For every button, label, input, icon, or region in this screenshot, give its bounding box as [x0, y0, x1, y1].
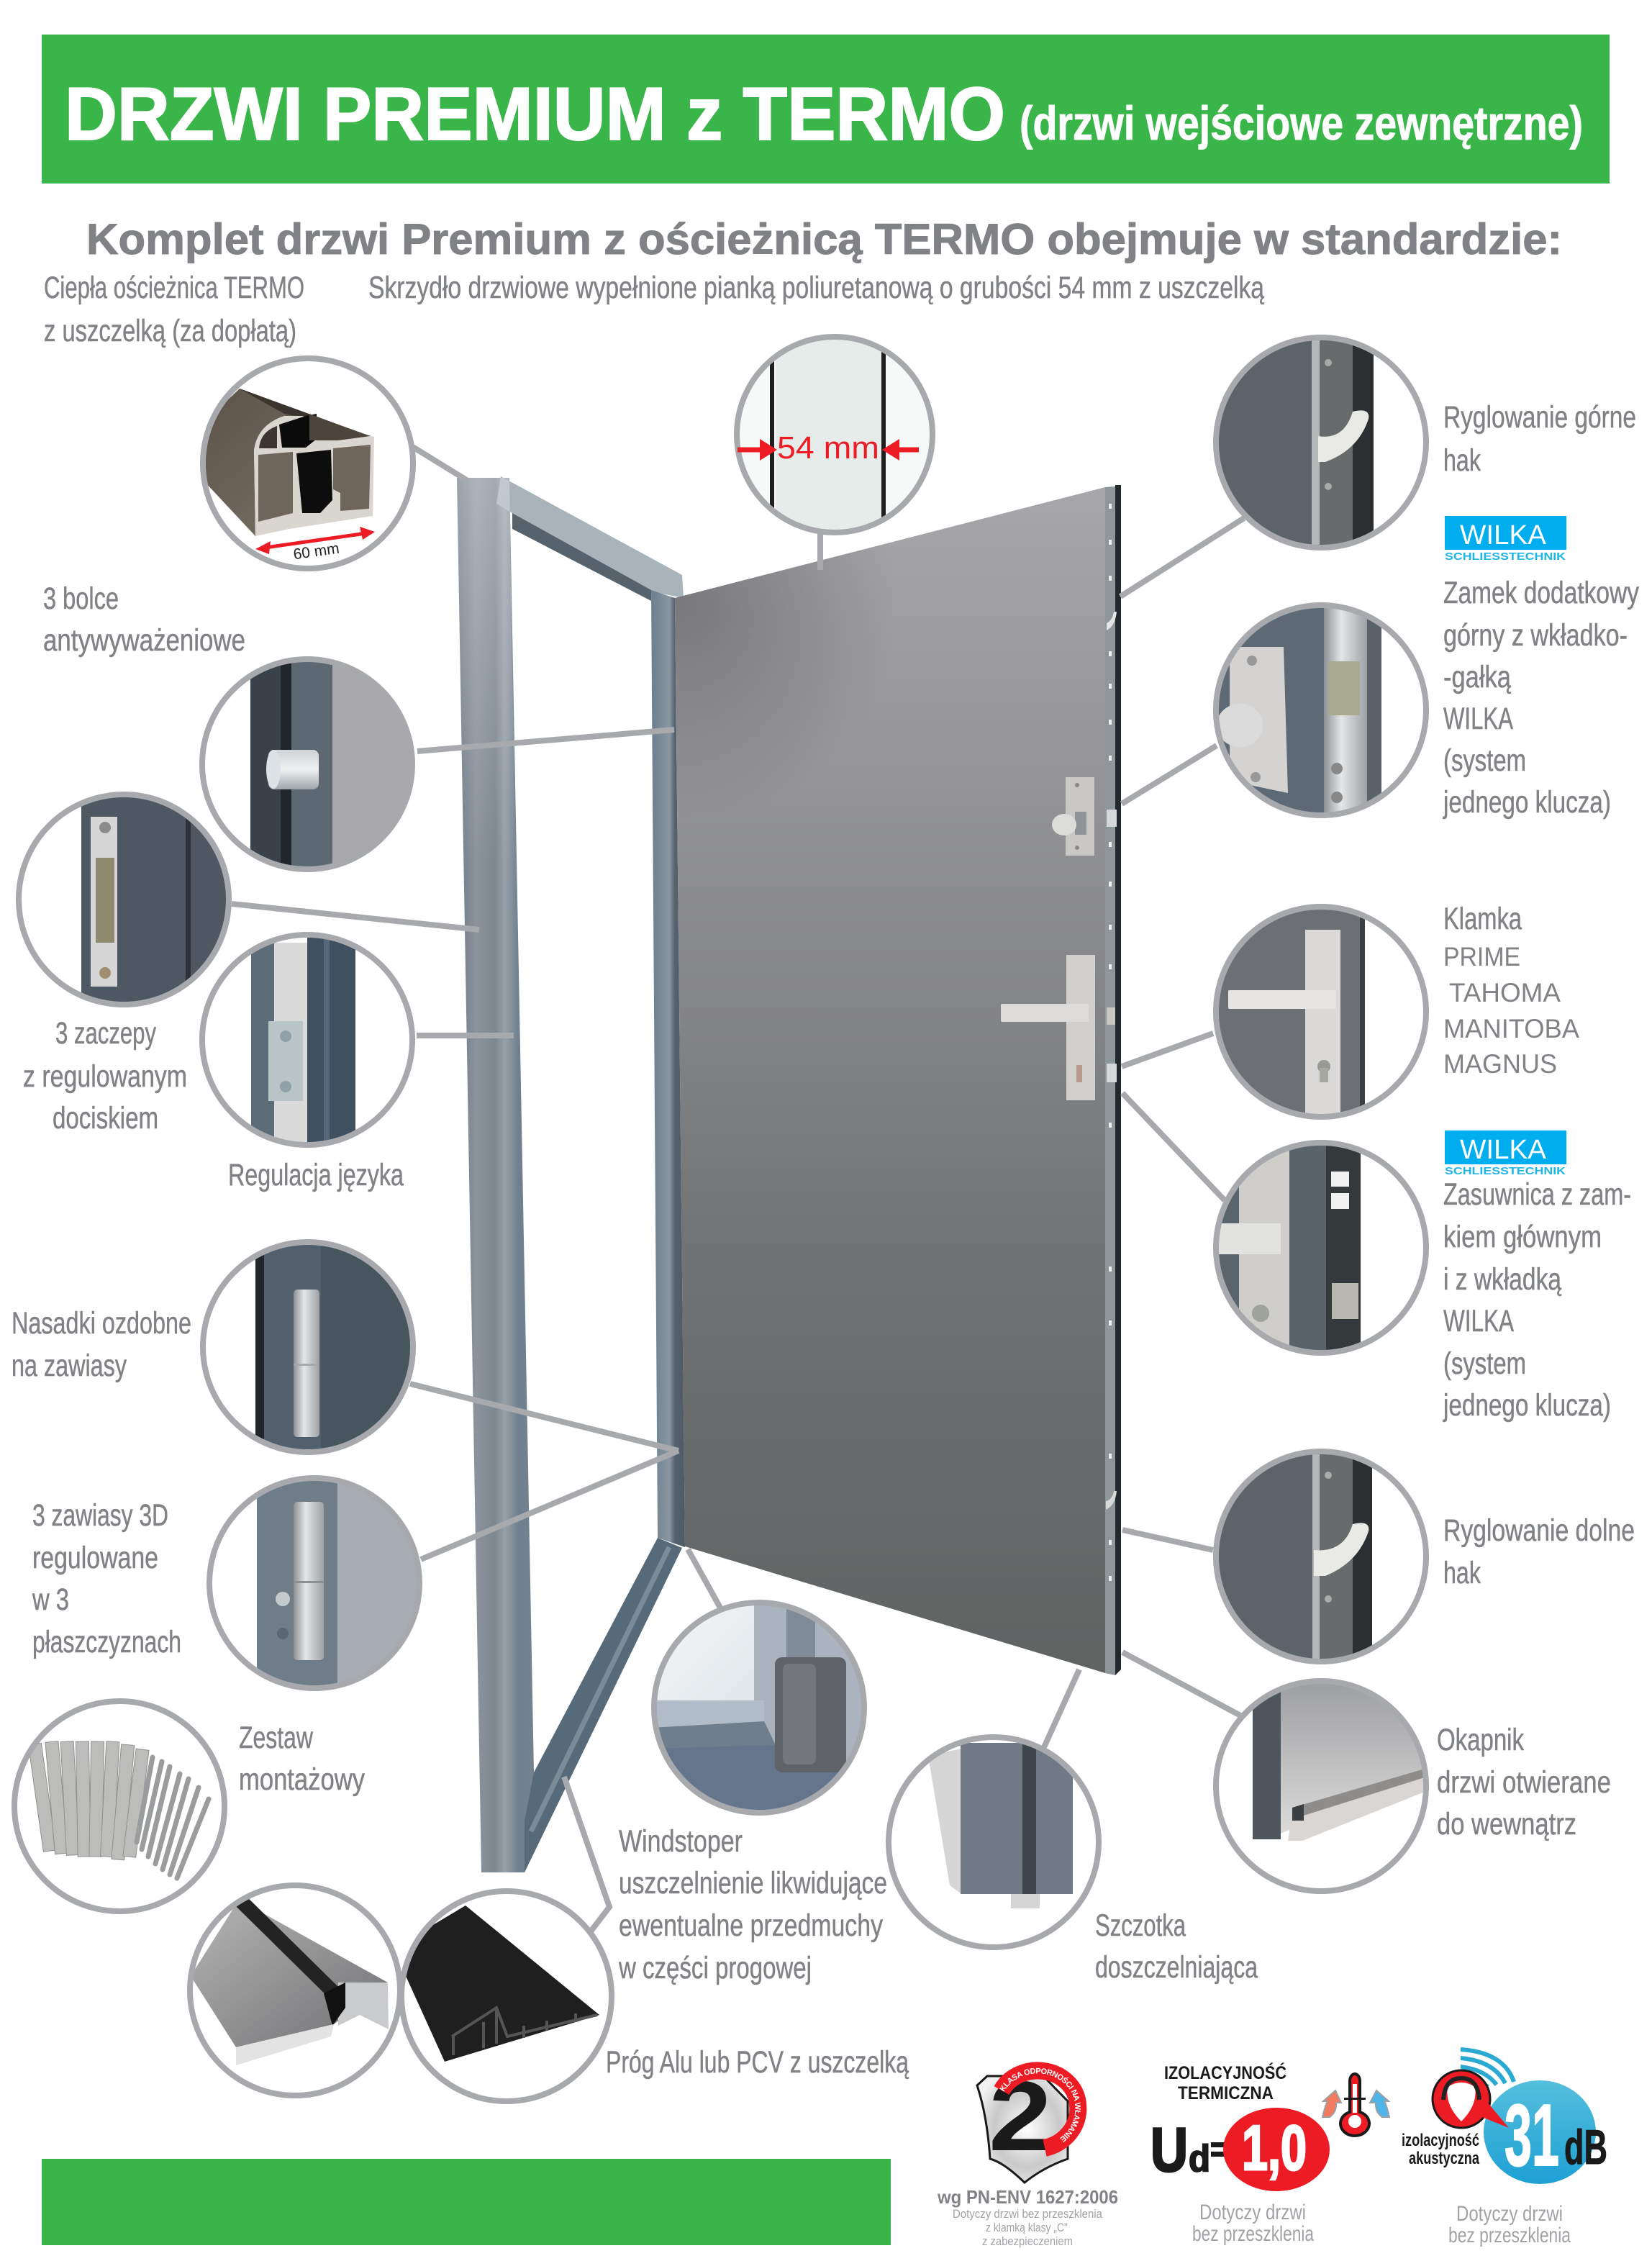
detail: hinge cap [200, 1239, 416, 1455]
label: strike plates: 3 zaczepy [55, 1016, 156, 1051]
detail: PVC threshold [399, 1888, 614, 2104]
label: strike plates: dociskiem [53, 1101, 158, 1136]
label: strike plates: z regulowanym [23, 1059, 187, 1094]
bottom green bar [42, 2159, 891, 2245]
label: hinge caps [12, 1306, 191, 1383]
leader: top hook [1120, 518, 1244, 597]
label: hinge caps: na zawiasy [12, 1349, 127, 1383]
frame top highlight [457, 478, 515, 864]
bottom diagonal of frame [525, 1538, 682, 1872]
leader: tongue adjustment [417, 1033, 514, 1038]
detail: 54 mm door section [734, 334, 935, 535]
leader: handle [1122, 1033, 1213, 1066]
caption: frame [44, 271, 304, 348]
leader: brush seal [1044, 1669, 1079, 1747]
red ring [1002, 2070, 1078, 2148]
leader: main lock [1122, 1093, 1225, 1200]
label: acoustic note: bez przeszklenia [1448, 2224, 1571, 2247]
Ud symbol: U [1150, 2116, 1188, 2185]
label: main lock: i z wkładką [1443, 1262, 1561, 1297]
label: anti-burglary bolts: 3 bolce [43, 581, 119, 616]
label: bottom hook [1443, 1513, 1635, 1590]
acoustic caption: akustyczna [1409, 2149, 1479, 2168]
acoustic caption: izolacyjność [1402, 2131, 1479, 2150]
detail: top hook [1213, 335, 1429, 550]
label: norm: z zabezpieczeniem [982, 2234, 1073, 2248]
leader: bottom hook [1122, 1530, 1213, 1550]
detail: tongue adjustment [199, 932, 415, 1148]
detail: bottom hook [1213, 1449, 1429, 1664]
label: tongue adjustment: Regulacja języka [228, 1158, 404, 1192]
detail: mounting kit [12, 1698, 228, 1914]
label: mounting kit: montażowy [239, 1762, 365, 1797]
label: handle models: PRIME [1443, 942, 1520, 971]
label: handle models: MAGNUS [1443, 1049, 1557, 1079]
thermal heading: IZOLACYJNOŚĆ [1164, 2062, 1286, 2083]
label: windstopper: ewentualne przedmuchy [619, 1908, 883, 1943]
numeral 2: 2 [989, 2061, 1052, 2172]
icon: warm arrow [1322, 2090, 1341, 2117]
60 mm dimension [255, 527, 375, 563]
caption: frame: Ciepła ościeżnica TERMO [44, 271, 304, 305]
thermal heading: TERMICZNA [1178, 2083, 1274, 2103]
value 31: 31 [1504, 2086, 1559, 2184]
label: norm: Dotyczy drzwi bez przeszklenia [953, 2207, 1102, 2221]
leader: upper lock [1122, 746, 1217, 804]
leader: threshold [564, 1777, 609, 1931]
label: drip cap: drzwi otwierane [1437, 1765, 1611, 1800]
label: anti-burglary bolts [43, 581, 245, 658]
lever handle [1001, 955, 1095, 1100]
title banner: DRZWI PREMIUM z TERMO [65, 73, 1005, 156]
detail: brush seal [886, 1734, 1102, 1950]
logo: WILKA top: SCHLIESSTECHNIK [1445, 550, 1566, 563]
knob lock plate [1052, 777, 1094, 856]
label: upper lock: -gałką [1443, 660, 1511, 694]
label: 3D hinges: 3 zawiasy 3D [32, 1498, 168, 1533]
label: norm: wg PN-ENV 1627:2006 [937, 2186, 1118, 2208]
label: drip cap: do wewnątrz [1437, 1807, 1576, 1841]
unit dB: dB [1564, 2120, 1607, 2175]
logo: WILKA top: WILKA [1460, 520, 1547, 550]
label: norm [937, 2186, 1118, 2248]
label: acoustic note [1448, 2202, 1571, 2247]
label: main lock: (system [1443, 1346, 1526, 1381]
label: norm: z klamką klasy „C" [986, 2221, 1068, 2234]
icon: sound waves [1461, 2049, 1514, 2087]
logo: WILKA main: SCHLIESSTECHNIK [1445, 1165, 1566, 1177]
label: main lock: WILKA [1443, 1304, 1514, 1338]
icon: head with headphones [1433, 2070, 1509, 2128]
shield [977, 2076, 1068, 2183]
leader: 54 mm [817, 531, 823, 570]
door leaf shadow [675, 542, 892, 828]
leader: 3D hinges [421, 1451, 678, 1559]
Ud symbol: d [1189, 2138, 1210, 2180]
badge: thermal insulation [1150, 2062, 1389, 2191]
label: windstopper [618, 1824, 887, 1985]
label: main lock: kiem głównym [1443, 1220, 1602, 1254]
label: top hook [1443, 400, 1636, 478]
leader: anti-burglary bolts [417, 730, 674, 751]
label: 3D hinges: regulowane [32, 1541, 158, 1575]
detail: 3D hinge [206, 1475, 424, 1691]
label: handle models [1443, 902, 1579, 1079]
acoustic caption [1402, 2131, 1479, 2168]
detail: upper lock [1213, 602, 1429, 818]
label: strike plates [23, 1016, 187, 1136]
Ud symbol [1150, 2116, 1225, 2185]
detail: main lock [1213, 1140, 1429, 1356]
leader: hinge caps [410, 1384, 678, 1451]
label: mounting kit [239, 1721, 365, 1797]
label: handle models: Klamka [1443, 902, 1522, 936]
label: brush seal: doszczelniająca [1095, 1950, 1258, 1985]
60 mm dimension: 60 mm [292, 540, 340, 563]
value 1,0: 1,0 [1242, 2112, 1307, 2183]
leader lines [232, 446, 1244, 1931]
label: mounting kit: Zestaw [239, 1721, 314, 1755]
left jamb [457, 478, 534, 1872]
icon: cold arrow [1370, 2090, 1389, 2117]
leader: windstopper [688, 1549, 721, 1609]
caption: frame: z uszczelką (za dopłatą) [44, 314, 296, 348]
detail: anti-burglary bolt [199, 656, 416, 872]
label: anti-burglary bolts: antywyważeniowe [43, 623, 245, 658]
detail: drip cap [1213, 1678, 1432, 1894]
label: brush seal: Szczotka [1095, 1908, 1186, 1943]
label: upper lock [1442, 576, 1639, 820]
thermal heading [1164, 2062, 1286, 2103]
leader: frame profile [412, 446, 468, 481]
label: windstopper: Windstoper [619, 1824, 743, 1859]
subtitle heading: Komplet drzwi Premium z ościeżnicą TERMO obejmuje w standardzie: [86, 215, 1562, 263]
label: upper lock: (system [1443, 743, 1526, 778]
logo: WILKA main [1445, 1130, 1566, 1177]
icon: thermometer [1340, 2074, 1369, 2136]
top crossbar [496, 476, 684, 601]
label: handle models: TAHOMA [1449, 978, 1561, 1007]
detail: handle [1213, 904, 1429, 1120]
detail: windstopper [651, 1600, 867, 1816]
caption: door leaf: Skrzydło drzwiowe wypełnione pianką poliuretanową o grubości 54 mm z uszczelką [368, 271, 1264, 305]
label: bottom hook: hak [1443, 1556, 1481, 1590]
door illustration [457, 476, 1121, 1872]
54 mm dimension: 54 mm [777, 430, 879, 466]
leader: drip cap [1122, 1652, 1240, 1716]
label: 3D hinges: w 3 [32, 1582, 69, 1617]
label: windstopper: w części progowej [618, 1951, 812, 1985]
door edge hardware [1105, 485, 1121, 1675]
label: acoustic note: Dotyczy drzwi [1456, 2202, 1563, 2226]
label: 3D hinges [32, 1498, 181, 1659]
label: handle models: MANITOBA [1443, 1014, 1579, 1043]
label: main lock [1442, 1177, 1631, 1423]
logo: WILKA top [1445, 516, 1566, 563]
label: windstopper: uszczelnienie likwidujące [619, 1866, 887, 1900]
detail: aluminium threshold [188, 1882, 404, 2098]
label: upper lock: WILKA [1443, 702, 1513, 736]
label: top hook: hak [1443, 443, 1481, 478]
label: drip cap: Okapnik [1437, 1723, 1524, 1757]
label: brush seal [1095, 1908, 1258, 1985]
label: hinge caps: Nasadki ozdobne [12, 1306, 191, 1341]
54 mm dimension [738, 430, 919, 466]
detail: frame profile [194, 355, 416, 571]
blue circle [1484, 2080, 1596, 2184]
detail: strike plate [18, 792, 234, 1007]
badge: acoustic insulation [1402, 2049, 1607, 2184]
badge: burglary class 2 [976, 2061, 1086, 2184]
label: threshold: Próg Alu lub PCV z uszczelką [606, 2045, 909, 2080]
leader: strike plate [232, 904, 479, 930]
label: thermal note [1192, 2201, 1314, 2246]
ring text: KLASA ODPORNOŚCI NA WŁAMANIE [999, 2068, 1081, 2143]
label: thermal note: Dotyczy drzwi [1199, 2201, 1306, 2224]
label: 3D hinges: płaszczyznach [32, 1625, 181, 1659]
label: drip cap [1437, 1723, 1611, 1841]
right jamb [651, 590, 685, 1547]
logo: WILKA main: WILKA [1460, 1135, 1547, 1165]
door leaf [675, 487, 1105, 1673]
label: thermal note: bez przeszklenia [1192, 2222, 1314, 2246]
title banner [42, 35, 1610, 183]
